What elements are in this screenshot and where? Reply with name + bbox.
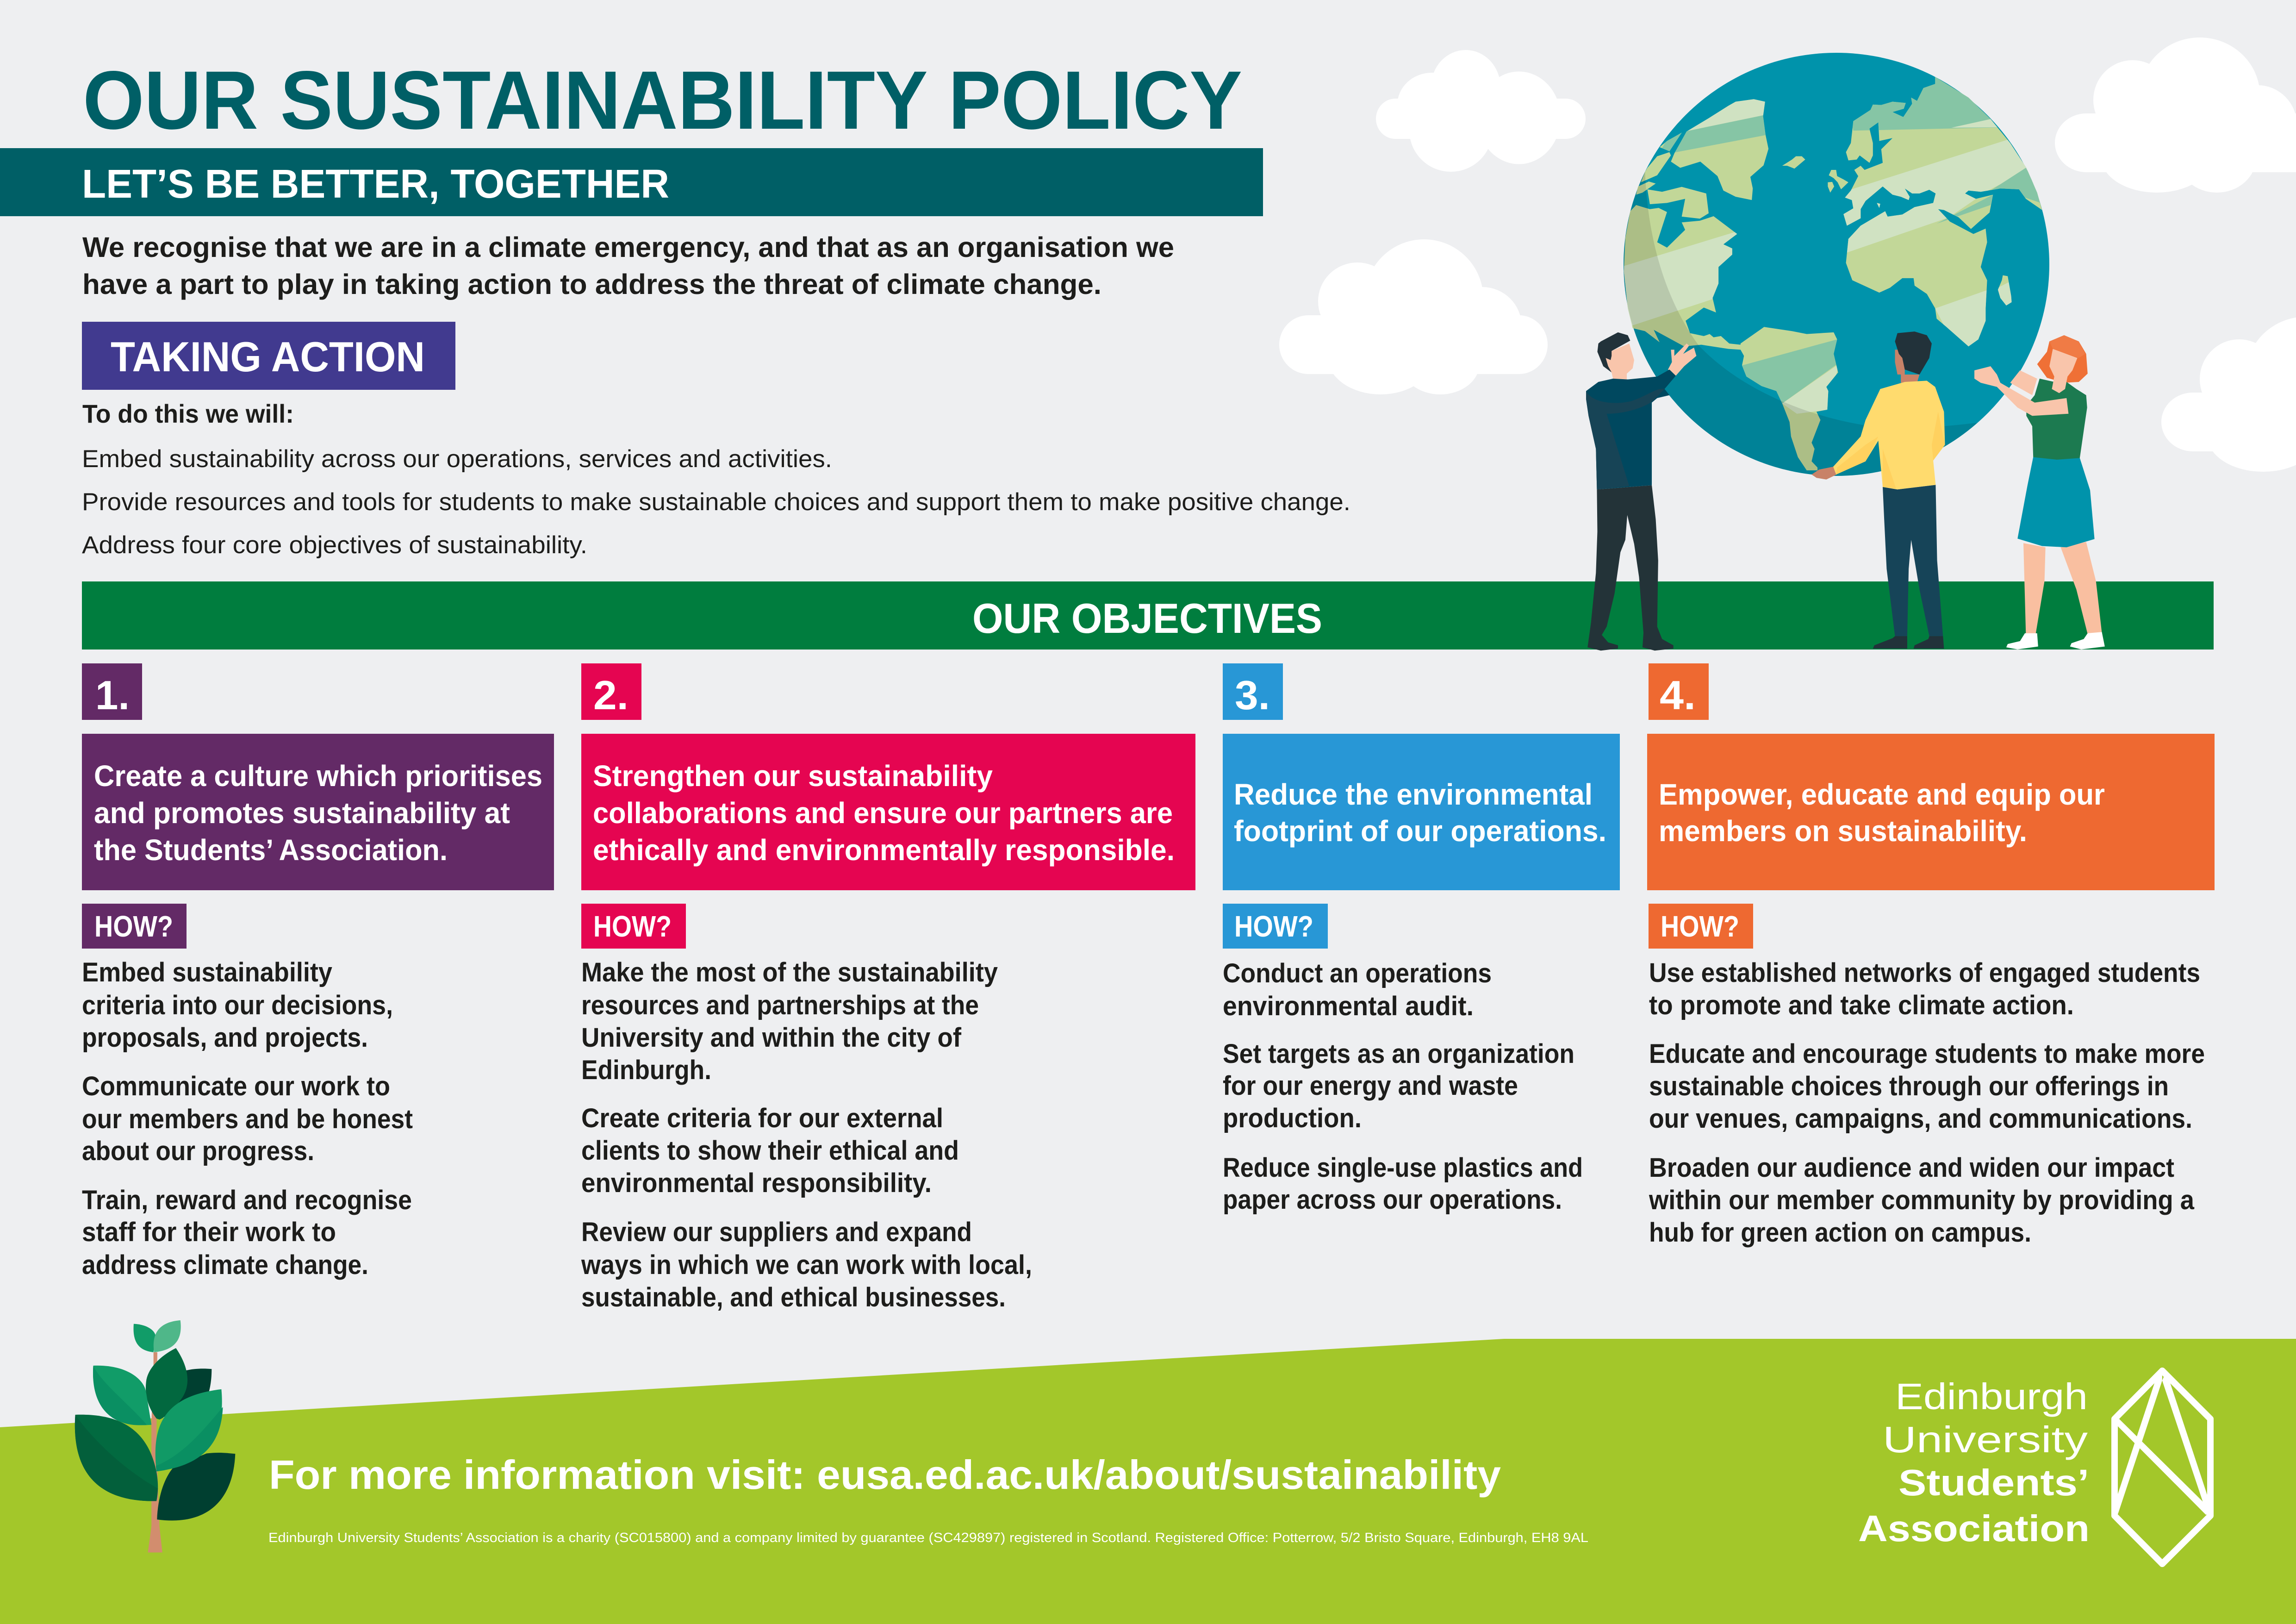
- icon: globe: [1624, 53, 2049, 476]
- how text 4: Educate and encourage students to make more: [1649, 1039, 2205, 1069]
- how text 3: environmental audit.: [1223, 991, 1474, 1021]
- cloud: top centre: [1376, 50, 1586, 172]
- how label 2: HOW?: [593, 910, 672, 943]
- how text 2: sustainable, and ethical businesses.: [581, 1282, 1006, 1312]
- subtitle banner: LET’S BE BETTER, TOGETHER: [82, 162, 669, 206]
- illustration: woman on right: [1974, 335, 2105, 650]
- objective 1 statement: [82, 734, 554, 890]
- how text 2: Edinburgh.: [581, 1055, 711, 1085]
- cloud: middle left: [1279, 239, 1548, 394]
- how text 4: within our member community by providing a: [1649, 1185, 2195, 1215]
- how text 1: [82, 957, 413, 1280]
- number 2: 2.: [593, 672, 628, 718]
- objectives banner: [82, 581, 2214, 650]
- how label 4: HOW?: [1661, 910, 1739, 943]
- panel: objective 2: [581, 663, 1195, 1312]
- how text 1: proposals, and projects.: [82, 1023, 368, 1053]
- how text 4: our venues, campaigns, and communications.: [1649, 1104, 2192, 1134]
- title: OUR SUSTAINABILITY POLICY: [83, 54, 1242, 146]
- text block: taking action list: Embed sustainability across our operations, services and activities.: [82, 445, 832, 473]
- how text 3: for our energy and waste: [1223, 1071, 1518, 1101]
- how text 2: Create criteria for our external: [581, 1103, 943, 1133]
- how text 3: paper across our operations.: [1223, 1185, 1562, 1215]
- objective 4 statement: members on sustainability.: [1659, 814, 2027, 848]
- objective 1 statement: Create a culture which prioritises: [94, 759, 542, 793]
- logo: wordmark: University: [1883, 1419, 2088, 1460]
- legal text: Edinburgh University Students’ Association is a charity (SC015800) and a company limited by guarantee (SC429897) registered in Scotland. Registered Office: Potterrow, 5/2 Bristo Square, Edinburgh, EH8 9AL: [268, 1530, 1588, 1545]
- panel: objective 4: [1647, 663, 2215, 1248]
- how text 1: criteria into our decisions,: [82, 990, 393, 1020]
- objective 3 statement: [1223, 734, 1620, 890]
- panel: objective 1: [82, 663, 554, 1280]
- how text 3: Reduce single-use plastics and: [1223, 1153, 1583, 1183]
- text block: taking action list: [82, 399, 1350, 559]
- icon: plant: [75, 1320, 235, 1553]
- how label 2: [581, 904, 686, 949]
- cloud: lower right: [2161, 317, 2296, 472]
- how text 2: resources and partnerships at the: [581, 990, 979, 1020]
- number 4: [1649, 663, 1709, 720]
- how text 4: sustainable choices through our offerings in: [1649, 1071, 2169, 1101]
- logo: wordmark: Students’: [1898, 1462, 2089, 1503]
- intro text: [82, 231, 1174, 300]
- illustration: man in middle: [1811, 331, 1945, 649]
- how text 4: Broaden our audience and widen our impact: [1649, 1153, 2174, 1183]
- how text 2: [581, 957, 1032, 1312]
- how label 3: [1223, 904, 1328, 949]
- how label 3: HOW?: [1234, 910, 1313, 943]
- how text 4: [1649, 958, 2205, 1248]
- objective 2 statement: collaborations and ensure our partners are: [593, 796, 1173, 830]
- objective 4 statement: [1647, 734, 2215, 890]
- how text 1: our members and be honest: [82, 1104, 413, 1134]
- cloud: top right: [2055, 37, 2296, 193]
- how text 1: Embed sustainability: [82, 957, 332, 987]
- how text 3: Set targets as an organization: [1223, 1039, 1574, 1069]
- how text 2: environmental responsibility.: [581, 1168, 932, 1198]
- how label 1: [82, 904, 187, 949]
- how text 2: University and within the city of: [581, 1023, 962, 1053]
- objective 3 statement: Reduce the environmental: [1234, 778, 1593, 811]
- how text 3: Conduct an operations: [1223, 958, 1492, 988]
- how label 1: HOW?: [94, 910, 173, 943]
- objective 3 statement: footprint of our operations.: [1234, 814, 1606, 848]
- logo: wordmark: [1858, 1376, 2090, 1549]
- objective 4 statement: Empower, educate and equip our: [1659, 778, 2105, 811]
- how text 2: ways in which we can work with local,: [581, 1250, 1032, 1280]
- how text 1: staff for their work to: [82, 1217, 336, 1247]
- clouds: [1279, 37, 2296, 472]
- number 1: 1.: [95, 672, 130, 718]
- objective 2 statement: ethically and environmentally responsible.: [593, 833, 1175, 867]
- intro text: have a part to play in taking action to address the threat of climate change.: [82, 269, 1101, 300]
- number 1: [82, 663, 142, 720]
- how text 4: hub for green action on campus.: [1649, 1218, 2031, 1248]
- heading: taking action: TAKING ACTION: [111, 334, 425, 381]
- objective 1 statement: and promotes sustainability at: [94, 796, 510, 830]
- how label 4: [1649, 904, 1753, 949]
- illustration: man on left: [1586, 332, 1696, 650]
- how text 4: Use established networks of engaged students: [1649, 958, 2200, 988]
- intro text: We recognise that we are in a climate emergency, and that as an organisation we: [82, 231, 1174, 263]
- heading: taking action: [82, 322, 455, 390]
- logo: wordmark: Association: [1858, 1508, 2090, 1549]
- how text 4: to promote and take climate action.: [1649, 990, 2074, 1020]
- number 3: [1223, 663, 1283, 720]
- how text 2: clients to show their ethical and: [581, 1136, 959, 1166]
- footer link: For more information visit: eusa.ed.ac.uk/about/sustainability: [269, 1452, 1501, 1498]
- logo: wordmark: Edinburgh: [1895, 1376, 2088, 1417]
- objective 2 statement: Strengthen our sustainability: [593, 759, 993, 793]
- objective 1 statement: the Students’ Association.: [94, 833, 448, 867]
- objective 2 statement: [581, 734, 1195, 890]
- panel: objective 3: [1223, 663, 1620, 1215]
- how text 1: Communicate our work to: [82, 1071, 390, 1101]
- subtitle banner: [0, 148, 1263, 216]
- how text 1: about our progress.: [82, 1136, 314, 1166]
- footer green band: [0, 1339, 2296, 1624]
- how text 3: [1223, 958, 1583, 1215]
- how text 2: Make the most of the sustainability: [581, 957, 998, 987]
- text block: taking action list: To do this we will:: [82, 399, 294, 428]
- text block: taking action list: Address four core objectives of sustainability.: [82, 531, 587, 559]
- number 4: 4.: [1660, 672, 1696, 718]
- how text 3: production.: [1223, 1103, 1362, 1133]
- heading: our objectives: OUR OBJECTIVES: [972, 595, 1322, 642]
- number 3: 3.: [1235, 672, 1270, 718]
- how text 1: Train, reward and recognise: [82, 1185, 412, 1215]
- how text 1: address climate change.: [82, 1250, 368, 1280]
- how text 2: Review our suppliers and expand: [581, 1217, 972, 1247]
- number 2: [581, 663, 641, 720]
- text block: taking action list: Provide resources and tools for students to make sustainable choices and support them to make positive change.: [82, 488, 1350, 516]
- logo: gem icon: [2113, 1371, 2210, 1564]
